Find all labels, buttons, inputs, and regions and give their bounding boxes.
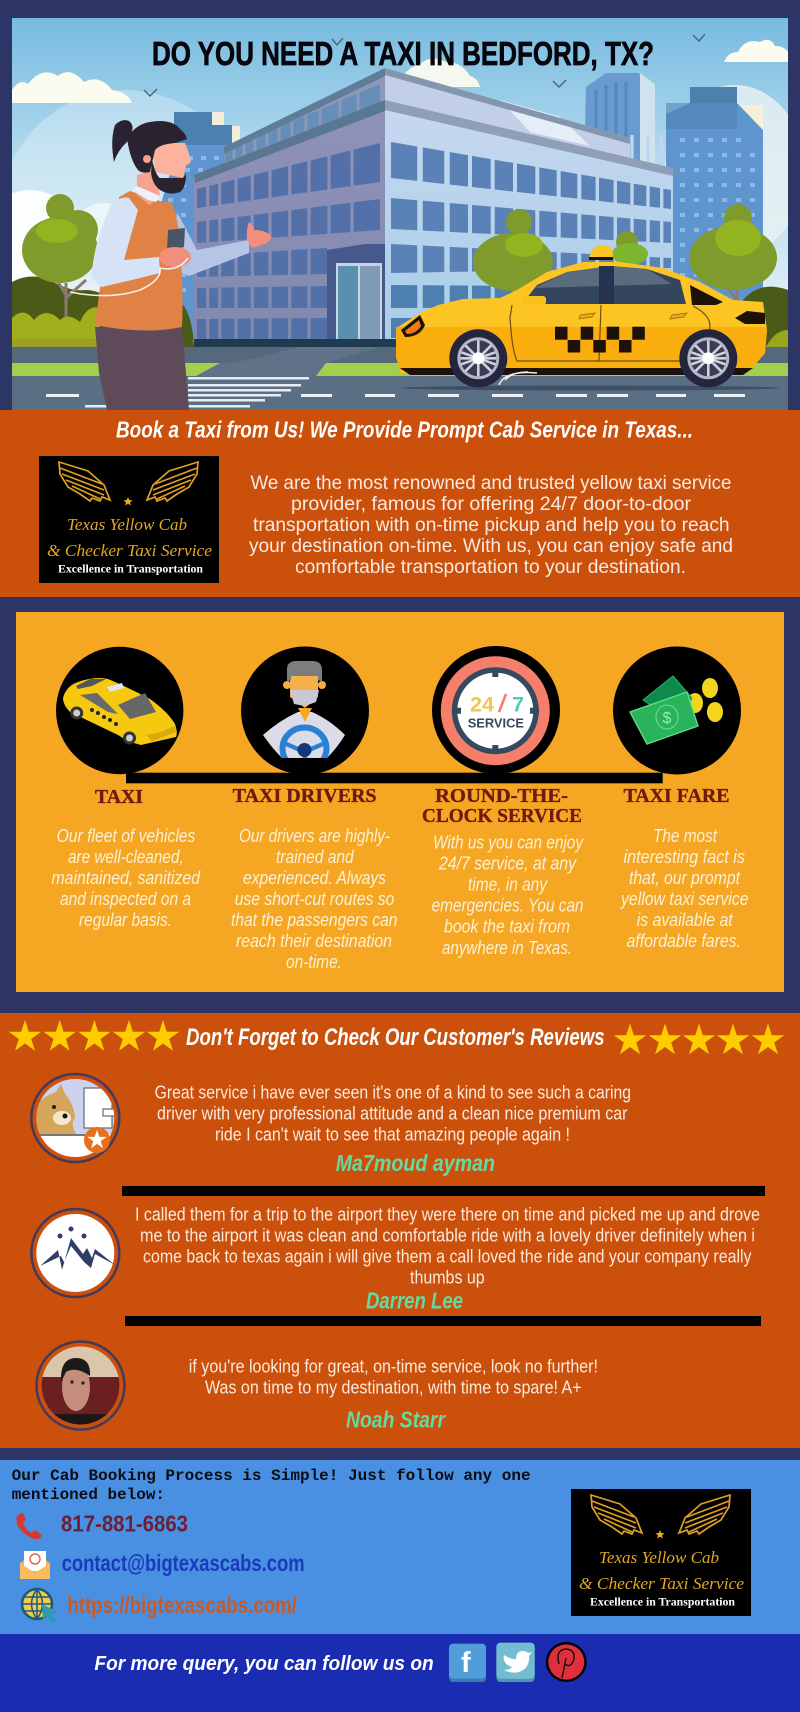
text: fare: affordable fares. xyxy=(626,931,741,951)
divider 2 xyxy=(125,1316,761,1326)
panel: booking contacts xyxy=(0,1460,800,1634)
ground and road xyxy=(12,347,788,410)
reviewer name: Darren Lee xyxy=(366,1287,463,1313)
text: fleet xyxy=(52,826,201,930)
column: round the clock xyxy=(422,785,584,958)
office building xyxy=(194,68,673,347)
intro heading: Book a Taxi from Us! We Provide Prompt Cab Service in Texas... xyxy=(116,416,693,442)
icon: facebook xyxy=(449,1644,486,1682)
website url: https://bigtexascabs.com/ xyxy=(67,1592,297,1618)
checker pattern xyxy=(555,327,645,352)
review 1: Great service i have ever seen it's one of a kind to see such a caring xyxy=(155,1082,631,1102)
right wall xyxy=(385,100,673,347)
heading: taxi: TAXI xyxy=(95,786,143,808)
phone number: 817-881-6863 xyxy=(61,1511,188,1537)
icon: 24/7 service: 7 xyxy=(512,694,524,717)
base strip xyxy=(194,339,404,347)
text: fare: interesting fact is xyxy=(624,847,745,867)
mirror xyxy=(522,296,546,304)
front wheel xyxy=(449,329,507,387)
text: fleet: are well-cleaned, xyxy=(68,847,184,867)
icon: money xyxy=(613,646,741,774)
icon: driver xyxy=(241,646,369,778)
icon: globe xyxy=(22,1589,58,1623)
intro paragraph: transportation with on-time pickup and help you to reach xyxy=(253,515,730,536)
road dashes xyxy=(46,394,745,397)
left windows xyxy=(197,143,380,339)
right parapet xyxy=(385,68,630,160)
outstretched arm xyxy=(172,212,249,276)
column: taxi xyxy=(52,786,201,930)
text: drivers: that the passengers can xyxy=(231,910,397,930)
company logo: Excellence in Transportation xyxy=(58,562,203,576)
company logo: & Checker Taxi Service xyxy=(47,541,212,560)
door lines xyxy=(510,305,710,361)
text: round the clock xyxy=(432,832,584,958)
review 1 xyxy=(155,1082,631,1176)
icon: pinterest xyxy=(546,1642,587,1682)
icon: 24/7 service: SERVICE xyxy=(468,715,524,730)
company logo: Texas Yellow Cab xyxy=(67,515,187,534)
left trees and bushes xyxy=(12,194,194,347)
heading: drivers: TAXI DRIVERS xyxy=(233,785,377,807)
text: round the clock: emergencies. You can xyxy=(432,896,584,916)
text: round the clock: book the taxi from xyxy=(444,917,570,937)
connector bar xyxy=(126,773,663,783)
reviewer name: Ma7moud ayman xyxy=(336,1150,495,1176)
panel: intro xyxy=(0,410,800,597)
clouds xyxy=(0,40,800,340)
intro paragraph: provider, famous for offering 24/7 door-to-door xyxy=(291,494,692,515)
sleeve xyxy=(92,198,160,287)
birds xyxy=(144,34,705,96)
review 3: Was on time to my destination, with time to spare! A+ xyxy=(205,1377,582,1397)
avatar: mountains xyxy=(31,1209,119,1297)
email address: contact@bigtexascabs.com xyxy=(62,1550,305,1576)
phone xyxy=(167,228,185,248)
underbody xyxy=(400,368,753,375)
hero illustration xyxy=(0,18,800,410)
text: fare xyxy=(619,826,748,951)
reviewer name: Noah Starr xyxy=(346,1406,446,1432)
column: fare xyxy=(619,785,748,951)
left parapet xyxy=(224,68,385,168)
heading: round the clock: CLOCK SERVICE xyxy=(422,805,582,827)
booking heading: Our Cab Booking Process is Simple! Just follow any one xyxy=(12,1467,531,1485)
intro paragraph: your destination on-time. With us, you can enjoy safe and xyxy=(249,536,733,557)
middle and right trees xyxy=(473,204,788,347)
stars left xyxy=(9,1020,179,1051)
yellow taxi xyxy=(396,245,780,390)
divider 1 xyxy=(122,1186,765,1196)
review 2 xyxy=(135,1204,760,1313)
follow text: For more query, you can follow us on xyxy=(94,1653,434,1675)
text: drivers: Our drivers are highly- xyxy=(239,826,390,846)
text: fare: is available at xyxy=(637,910,734,930)
company logo: & Checker Taxi Service xyxy=(579,1574,744,1593)
company logo: Texas Yellow Cab xyxy=(599,1548,719,1567)
text: round the clock: anywhere in Texas. xyxy=(442,938,572,958)
title: DO YOU NEED A TAXI IN BEDFORD, TX? xyxy=(152,35,654,72)
text: fare: that, our prompt xyxy=(629,868,741,888)
neck and collar xyxy=(137,170,160,205)
icon: money: $ xyxy=(662,710,672,727)
text: fare: The most xyxy=(653,826,718,846)
left wall xyxy=(194,102,385,347)
icon: taxi xyxy=(56,647,183,774)
review 1: ride I can't wait to see that amazing people again ! xyxy=(215,1124,570,1144)
booking heading xyxy=(12,1467,531,1504)
stars right xyxy=(614,1024,784,1054)
vest xyxy=(95,191,183,331)
column: drivers xyxy=(231,785,397,972)
text: round the clock: 24/7 service, at any xyxy=(438,854,577,874)
review 3 xyxy=(189,1356,598,1432)
intro paragraph: comfortable transportation to your destination. xyxy=(295,557,686,578)
text: fare: yellow taxi service xyxy=(619,889,748,909)
text: drivers: trained and xyxy=(276,847,354,867)
company logo xyxy=(39,456,219,583)
text: fleet: regular basis. xyxy=(79,910,172,930)
sky xyxy=(12,18,788,346)
rear wheel xyxy=(679,329,737,387)
reviews heading: Don't Forget to Check Our Customer's Reviews xyxy=(186,1024,605,1051)
text: fleet: maintained, sanitized xyxy=(52,868,201,888)
text: drivers xyxy=(231,826,397,972)
beard xyxy=(151,160,186,194)
person hailing taxi xyxy=(70,120,271,410)
intro paragraph xyxy=(249,473,733,578)
background towers xyxy=(162,73,763,350)
icon: email xyxy=(20,1551,50,1579)
icon: phone xyxy=(16,1513,42,1539)
heading: fare: TAXI FARE xyxy=(624,785,730,807)
heading: round the clock xyxy=(422,785,582,827)
avatar: man xyxy=(36,1342,124,1430)
text: drivers: on-time. xyxy=(286,952,342,972)
icon: facebook: f xyxy=(461,1647,471,1679)
roof sign xyxy=(589,245,613,258)
review 1: driver with very professional attitude and a clean nice premium car xyxy=(157,1103,628,1123)
trousers xyxy=(95,325,189,410)
text: drivers: experienced. Always xyxy=(243,868,386,888)
avatar: dog xyxy=(31,1074,119,1162)
booking heading: mentioned below: xyxy=(12,1486,165,1504)
intro paragraph: We are the most renowned and trusted yellow taxi service xyxy=(250,473,732,494)
text: drivers: reach their destination xyxy=(236,931,392,951)
company logo: Excellence in Transportation xyxy=(590,1595,735,1609)
taxi body xyxy=(396,262,767,373)
text: round the clock: time, in any xyxy=(468,875,548,895)
panel: social footer xyxy=(0,1634,800,1712)
headlight and tail light xyxy=(401,315,425,337)
text: fleet: and inspected on a xyxy=(60,889,191,909)
text: fleet: Our fleet of vehicles xyxy=(57,826,195,846)
review 3: if you're looking for great, on-time service, look no further! xyxy=(189,1356,598,1376)
review 2: thumbs up xyxy=(410,1267,485,1287)
heading: round the clock: ROUND-THE- xyxy=(435,785,568,807)
icon: 24/7 service xyxy=(432,646,560,774)
icon: twitter xyxy=(496,1643,535,1682)
text: drivers: use short-cut routes so xyxy=(235,889,394,909)
earphone wire xyxy=(70,258,188,296)
entrance xyxy=(327,244,385,340)
crosswalk xyxy=(85,377,309,408)
text: round the clock: With us you can enjoy xyxy=(433,832,584,852)
face xyxy=(152,143,191,178)
right windows xyxy=(391,142,671,338)
windows xyxy=(522,266,686,304)
panel: customer reviews xyxy=(0,1013,800,1448)
icon: 24/7 service: 24 xyxy=(470,694,494,717)
company logo xyxy=(571,1489,751,1616)
panel: services xyxy=(16,612,784,992)
hair xyxy=(127,121,187,173)
